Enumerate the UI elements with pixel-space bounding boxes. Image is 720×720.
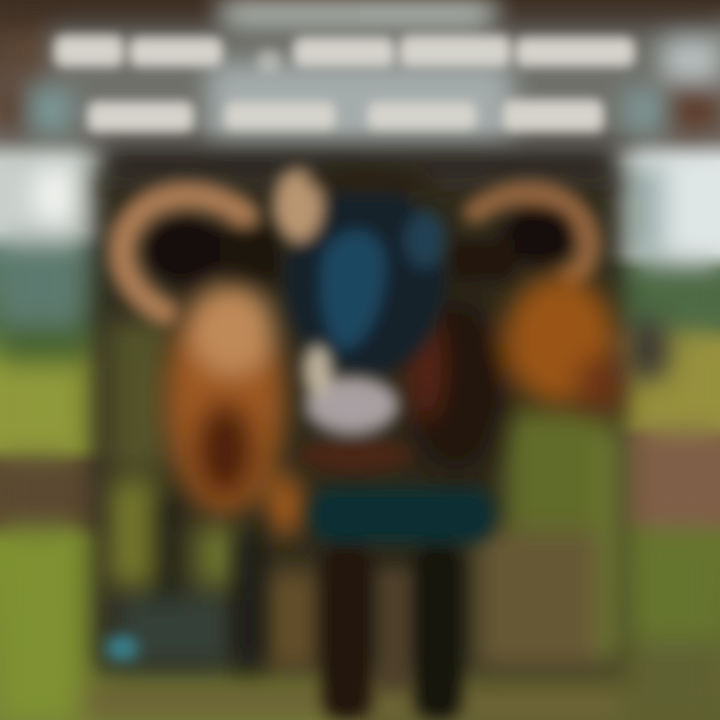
panel: central poster frame — [92, 145, 624, 675]
title line 1 — [55, 36, 634, 72]
cow: front left leg — [235, 530, 263, 670]
cow: teal chest and legs — [310, 488, 495, 720]
header band: barn roof and sky — [0, 0, 720, 150]
title line 2 — [88, 100, 603, 132]
cow: right body — [403, 275, 670, 473]
background: farm landscape — [0, 150, 720, 720]
icon: left horn — [122, 195, 280, 312]
icon: teal patch bottom left — [106, 636, 138, 660]
icon: right horn — [450, 193, 589, 280]
cow: white muzzle — [297, 344, 413, 473]
cow: left body — [165, 285, 301, 537]
cow: head — [274, 166, 445, 375]
title — [55, 36, 634, 132]
